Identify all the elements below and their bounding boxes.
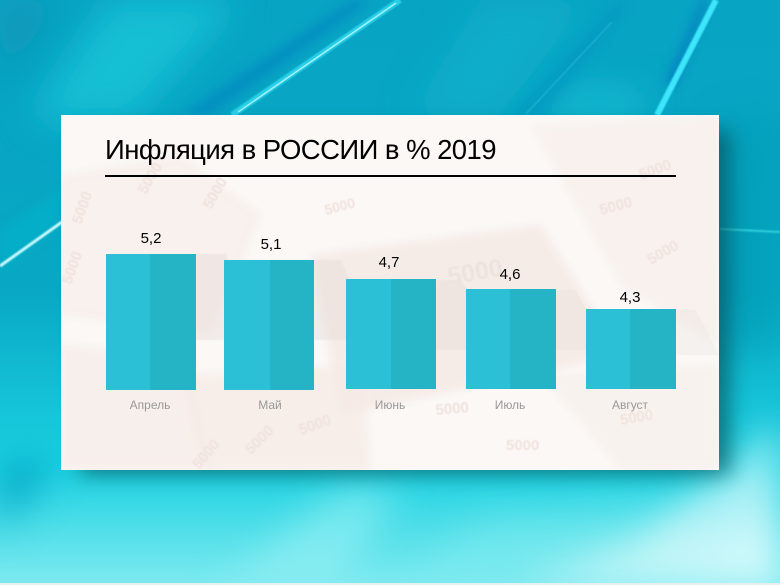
banknote pattern background: 5000 <box>435 399 470 419</box>
banknote pattern background: 5000 <box>323 194 357 218</box>
label: Апрель: Апрель <box>130 398 170 412</box>
banknote pattern background: 5000 <box>242 422 277 458</box>
banknote pattern background: 5000 <box>445 254 505 291</box>
banknote pattern background: 5000 <box>637 156 674 184</box>
bar: Июнь 4,7 <box>346 279 436 389</box>
banknote pattern background: 5000 <box>506 437 539 454</box>
value: Июль: 4,6 <box>500 266 520 283</box>
bar: Апрель 5,2 <box>106 254 196 390</box>
label: Май: Май <box>258 398 282 412</box>
value: Май: 5,1 <box>261 236 281 253</box>
banknote pattern background: 5000 <box>200 175 231 212</box>
title rule <box>105 175 676 177</box>
bar: Май 5,1 <box>224 260 314 390</box>
bar chart <box>106 230 676 412</box>
banknote pattern background: 5000 <box>598 194 634 219</box>
value: Август: 4,3 <box>620 289 640 306</box>
value: Июнь: 4,7 <box>379 254 399 271</box>
title: Инфляция в РОССИИ в % 2019 <box>105 134 496 165</box>
label: Август: Август <box>612 398 648 412</box>
banknote pattern background: 5000 <box>69 189 96 226</box>
label: Июнь: Июнь <box>375 398 405 412</box>
panel: chart card <box>61 115 719 470</box>
value: Апрель: 5,2 <box>141 230 161 247</box>
banknote pattern background <box>61 156 716 470</box>
panel shadow <box>80 130 730 475</box>
banknote pattern background: 5000 <box>644 237 682 268</box>
banknote pattern background: 5000 <box>619 406 655 429</box>
label: Июль: Июль <box>495 398 525 412</box>
bar: Июль 4,6 <box>466 289 556 389</box>
banknote pattern background: 5000 <box>297 411 334 439</box>
bar: Август 4,3 <box>586 309 676 389</box>
banknote pattern background: 5000 <box>135 160 166 197</box>
